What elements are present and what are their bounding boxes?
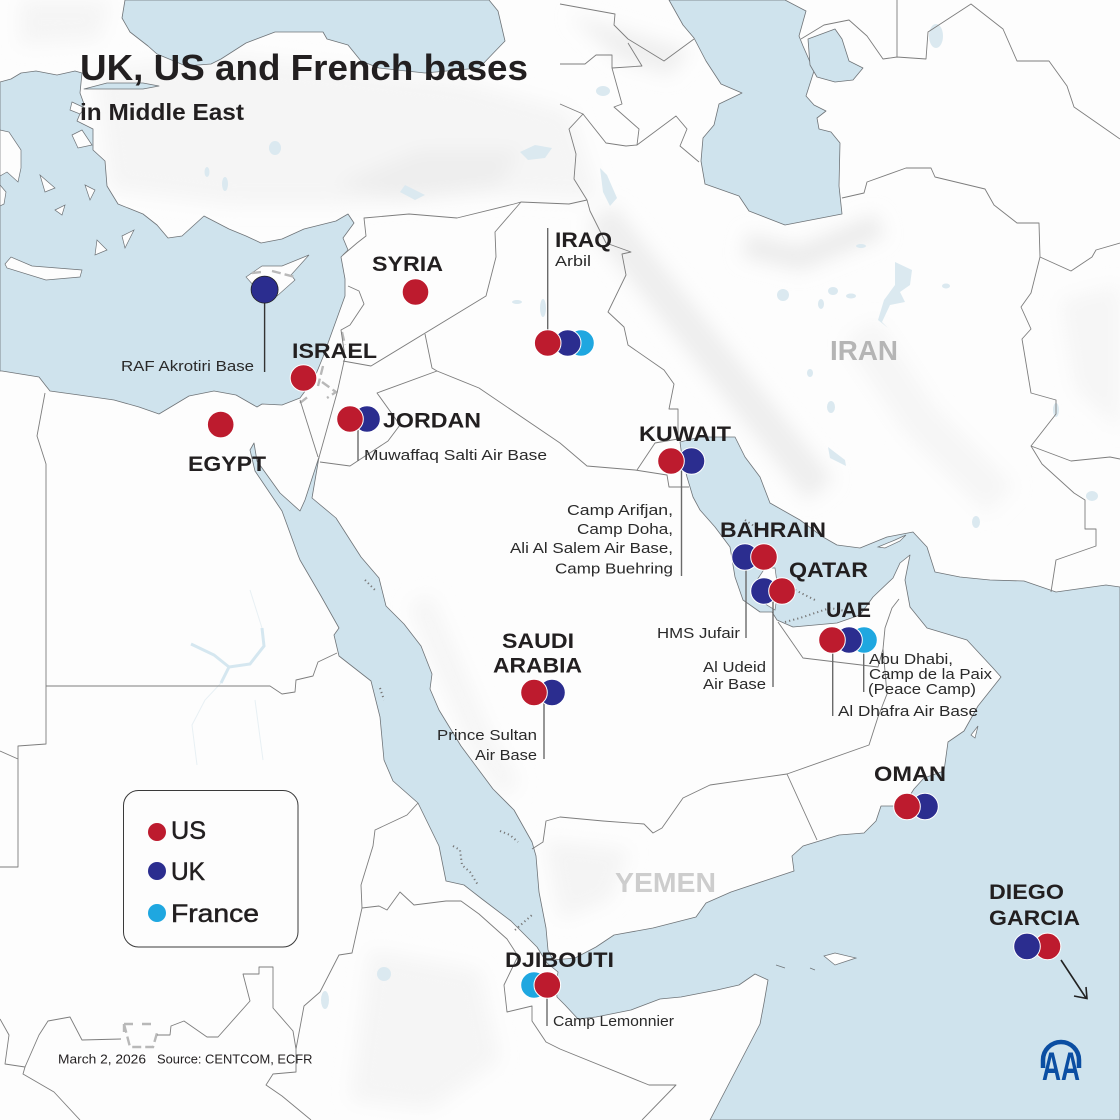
marker and label: Jordan (337, 406, 547, 464)
Mediterranean and Aegean (0, 71, 354, 414)
marker and label: Djibouti (505, 949, 674, 1030)
marker and label: Bahrain: BAHRAIN (720, 519, 826, 542)
marker and label: UAE: Camp de la Paix (869, 666, 993, 683)
legend (124, 790, 298, 947)
marker and label: Saudi Arabia: ARABIA (493, 654, 582, 678)
marker and label: UAE: (Peace Camp) (868, 681, 976, 698)
marker and label: Jordan: Muwaffaq Salti Air Base (364, 447, 547, 464)
icon: Anadolu Agency logo: AA (1042, 1045, 1080, 1089)
marker and label: Bahrain: HMS Jufair (657, 625, 740, 642)
marker and label: Qatar: Al Udeid (703, 659, 766, 676)
marker and label: UAE (819, 599, 993, 720)
marker and label: Diego Garcia: DIEGO (989, 881, 1064, 904)
marker and label: Kuwait: KUWAIT (639, 423, 731, 446)
marker and label: Syria: SYRIA (372, 253, 443, 276)
marker and label: Iraq: IRAQ (555, 229, 612, 252)
marker and label: UAE: UAE (826, 599, 871, 622)
marker: Cyprus (251, 276, 278, 303)
marker and label: Bahrain (657, 519, 826, 642)
Caspian and Aral inlet (669, 0, 863, 225)
legend: UK (148, 858, 205, 886)
Persian Gulf, Arabian Sea, Gulf of Aden and Red Sea (250, 437, 1120, 1120)
legend: US: US (171, 817, 206, 845)
marker and label: Jordan: JORDAN (383, 410, 481, 432)
Greek mainland fragment (0, 130, 21, 206)
marker and label: Syria (372, 253, 443, 305)
marker and label: Kuwait: Camp Doha, (577, 521, 673, 538)
marker and label: Diego Garcia: GARCIA (989, 907, 1080, 930)
marker and label: Oman (874, 763, 946, 820)
marker and label: Saudi Arabia: Air Base (475, 747, 537, 764)
marker and label: Iraq: Arbil (555, 253, 591, 270)
marker and label: Qatar: QATAR (789, 559, 868, 582)
subtitle: in Middle East (80, 99, 244, 125)
legend: US (148, 817, 206, 845)
marker and label: Djibouti: DJIBOUTI (505, 949, 614, 972)
legend: UK: UK (171, 858, 205, 886)
islands in Red Sea and Gulf (365, 520, 850, 930)
label: Cyprus base: RAF Akrotiri Base (121, 358, 254, 375)
inland water (204, 24, 1098, 1009)
disputed outlines (124, 271, 345, 1047)
Black Sea (122, 0, 505, 73)
arrow: Diego Garcia direction (1061, 960, 1087, 998)
marker and label: Israel: ISRAEL (292, 340, 377, 363)
marker and label: Djibouti: Camp Lemonnier (553, 1013, 674, 1030)
ghost country labels: IRAN (830, 335, 898, 366)
marker and label: Qatar: Air Base (703, 676, 766, 693)
marker and label: Oman: OMAN (874, 763, 946, 786)
marker and label: UAE: Abu Dhabi, (869, 651, 953, 668)
marker and label: Diego Garcia (989, 881, 1080, 960)
ghost country labels (615, 335, 898, 898)
marker and label: Egypt: EGYPT (188, 453, 266, 476)
marker and label: Kuwait: Camp Buehring (555, 560, 673, 578)
marker and label: Iraq (534, 229, 612, 356)
leader lines (265, 228, 864, 1026)
title: UK, US and French bases (80, 47, 528, 88)
marker and label: UAE: Al Dhafra Air Base (838, 703, 978, 720)
marker and label: Kuwait (510, 423, 731, 578)
legend: France: France (171, 900, 259, 928)
marker and label: Egypt (188, 411, 266, 476)
Sea of Marmara (84, 83, 159, 89)
source line: Source: CENTCOM, ECFR (157, 1052, 312, 1066)
title (80, 47, 528, 125)
marker and label: Israel (290, 340, 377, 391)
source line: March 2, 2026 (58, 1052, 146, 1066)
marker and label: Saudi Arabia: Prince Sultan (437, 727, 537, 744)
marker and label: Saudi Arabia: SAUDI (502, 630, 574, 653)
marker and label: Saudi Arabia (437, 630, 582, 764)
islands (5, 102, 978, 970)
marker and label: Qatar (703, 559, 868, 693)
source line (58, 1052, 312, 1066)
marker and label: Kuwait: Camp Arifjan, (567, 502, 673, 519)
ghost country labels: YEMEN (615, 867, 716, 898)
icon: Anadolu Agency logo (1042, 1042, 1080, 1089)
marker and label: Kuwait: Ali Al Salem Air Base, (510, 540, 673, 557)
